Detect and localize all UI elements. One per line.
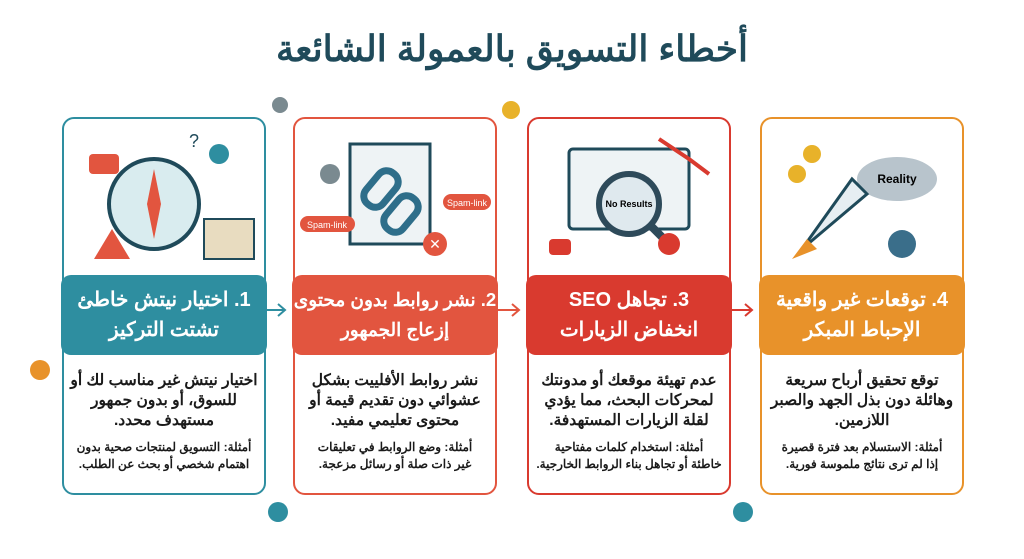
title: أخطاء التسويق بالعمولة الشائعة (276, 28, 748, 69)
icon: broken link: Spam-link (447, 198, 488, 208)
header 4: الإحباط المبكر (804, 319, 920, 341)
icon: broken link: Spam-link (307, 220, 348, 230)
text 1 (69, 369, 258, 472)
text 3: أمثلة: استخدام كلمات مفتاحية (555, 440, 703, 454)
header 1: تشتت التركيز (109, 319, 219, 341)
text 2 (308, 370, 481, 472)
header 3: 3. تجاهل SEO (569, 289, 689, 311)
panel: card 3 (527, 117, 731, 495)
text 4: أمثلة: الاستسلام بعد فترة قصيرة (782, 440, 942, 454)
icon: compass: ? (189, 131, 199, 151)
text 3: خاطئة أو تجاهل بناء الروابط الخارجية. (536, 457, 722, 471)
header 1 (61, 275, 267, 355)
header 3: انخفاض الزيارات (560, 319, 698, 341)
icon: broken link (300, 142, 491, 256)
text 4 (770, 369, 953, 472)
header 1: 1. اختيار نيتش خاطئ (77, 289, 251, 311)
header 4 (759, 275, 965, 355)
icon: rocket and cloud (788, 145, 937, 259)
text 3 (536, 369, 722, 472)
header 3 (526, 275, 732, 355)
icon: broken link: ✕ (429, 236, 441, 252)
panel: card 4 (760, 117, 964, 495)
text 4: إذا لم ترى نتائج ملموسة فورية. (786, 457, 938, 471)
text 1: أمثلة: التسويق لمنتجات صحية بدون (77, 440, 251, 454)
header 2 (292, 275, 498, 355)
text 4: توقع تحقيق أرباح سريعة وهائلة دون بذل الجهد والصبر اللازمين. (771, 372, 953, 429)
text 2: أمثلة: وضع الروابط في تعليقات (318, 440, 472, 454)
text 2: نشر روابط الأفلييت بشكل عشوائي دون تقديم قيمة أو محتوى تعليمي مفيد. (309, 372, 481, 429)
header 4: 4. توقعات غير واقعية (776, 289, 948, 311)
header 2: إزعاج الجمهور (341, 319, 449, 340)
text 1: اهتمام شخصي أو بحث عن الطلب. (79, 457, 249, 471)
panel: card 2 (293, 117, 497, 495)
text 3: عدم تهيئة موقعك أو مدونتك لمحركات البحث، مما يؤدي لقلة الزيارات المستهدفة. (541, 372, 717, 429)
header 2: 2. نشر روابط بدون محتوى (294, 289, 496, 310)
text 2: غير ذات صلة أو رسائل مزعجة. (319, 457, 471, 471)
text 1: اختيار نيتش غير مناسب لك أو للسوق، أو بدون جمهور مستهدف محدد. (70, 372, 258, 429)
icon: search no results: No Results (605, 199, 653, 209)
panel: card 1 (62, 117, 266, 495)
icon: search no results (549, 137, 710, 255)
icon: rocket and cloud: Reality (877, 172, 917, 186)
icon: compass (89, 131, 255, 260)
